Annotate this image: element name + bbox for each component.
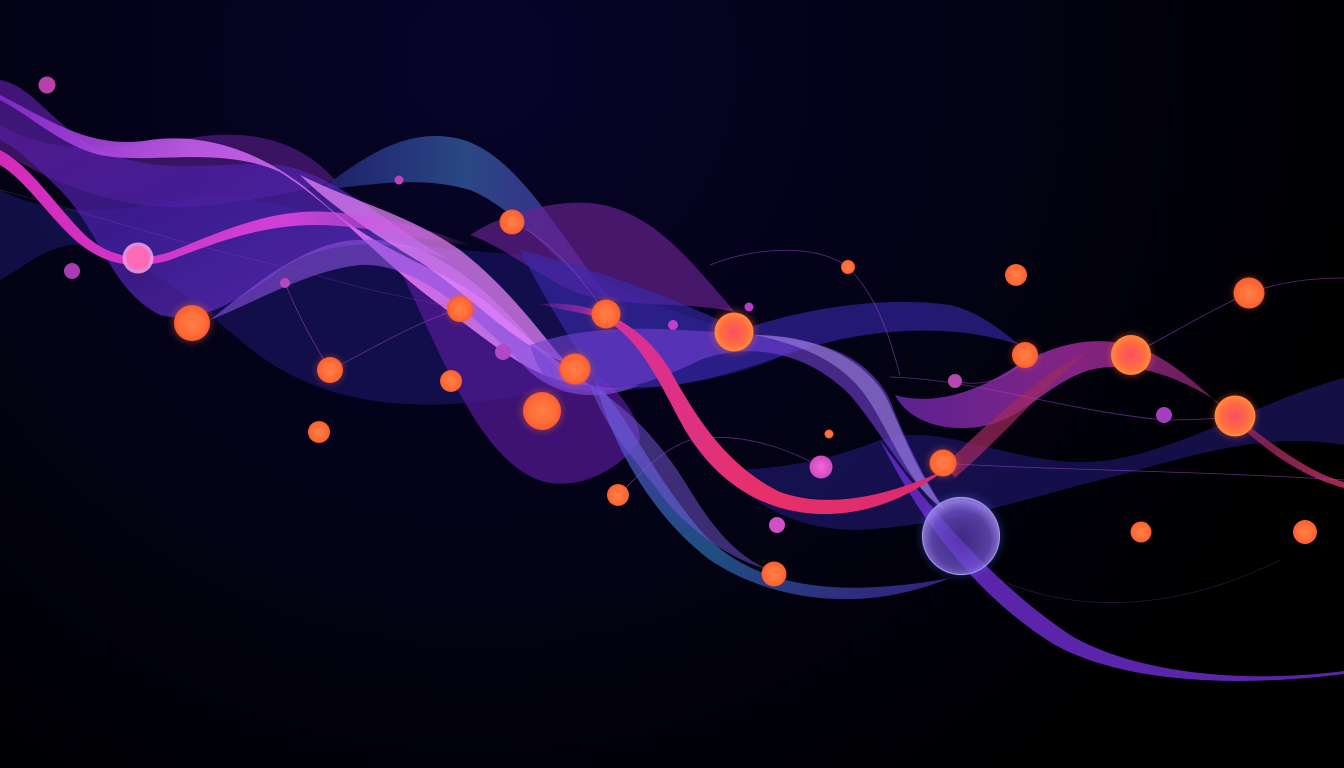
ribbon: right magenta wave [895,341,1344,488]
ribbon: pale violet upper band [0,95,590,385]
node: left large [174,305,210,341]
ribbon: left upper purple hump [0,125,335,207]
ribbon: right navy wave [720,378,1344,530]
ribbon: lilac sheen near orb [755,335,945,510]
ribbons: middle layer [0,80,1344,570]
ribbon: lower central purple [400,270,640,484]
ribbon: upper purple hump [470,203,735,312]
ribbon: red strand centre [540,304,945,514]
node: pale pink highlighted [122,242,154,274]
ribbons: front layer [0,150,945,514]
ribbon: top blue arc [320,136,610,300]
pink nodes [38,76,1172,533]
ribbon: long lower right purple tail [880,440,1344,681]
ribbon: violet lower fold [210,240,640,395]
large glass orb [920,495,1002,577]
ribbon: lower blue sweep [595,380,950,599]
ribbon: main violet body left [0,80,450,317]
node glows [173,278,1264,477]
line: connector mesh [285,283,330,370]
fine connector lines [0,190,1344,603]
ribbon: magenta strand left [0,150,470,265]
ribbon: central violet sash [530,329,945,510]
ribbons: back layer [0,125,1344,681]
ribbon: left navy veil [0,190,800,405]
ribbon: mid indigo band [520,250,1020,387]
orange nodes [174,210,1317,586]
ribbon: red tail returning to centre [945,350,1090,478]
ribbon: bright lilac highlight [300,175,565,362]
ribbon: lower diagonal violet [590,385,770,570]
